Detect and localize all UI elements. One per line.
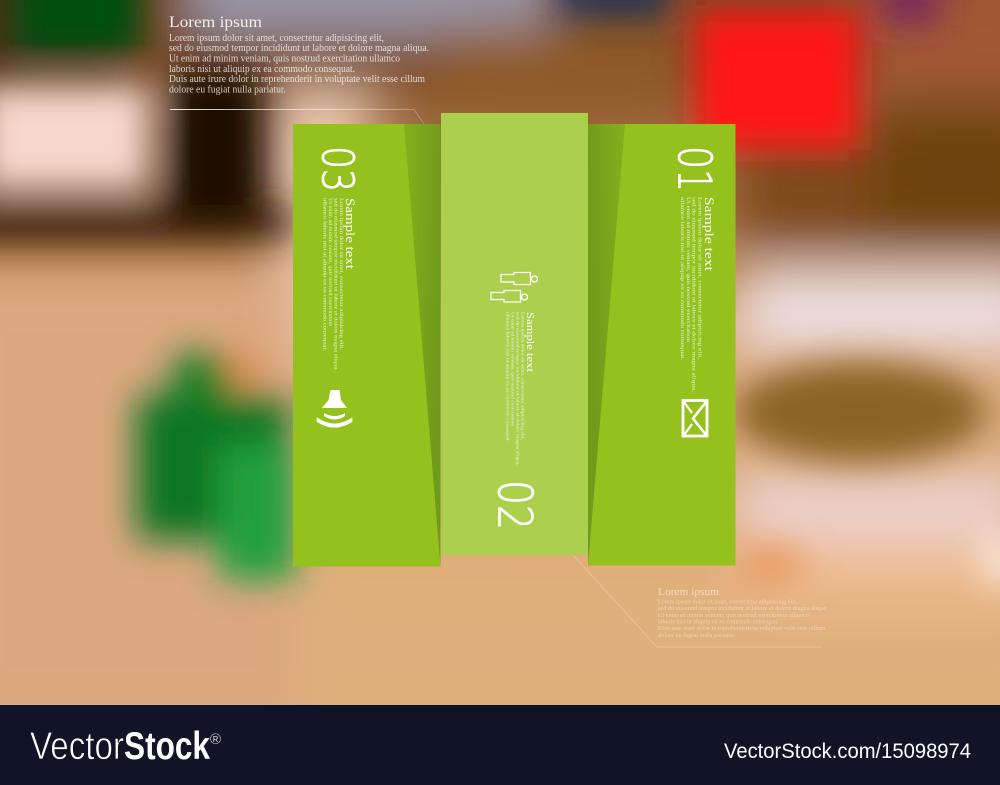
paragraph 02 bbox=[506, 312, 526, 466]
paragraph 01: Ut enim ad minim veniam, quis nostrud exercitation bbox=[685, 197, 691, 342]
bottom paragraph bbox=[658, 598, 828, 639]
paragraph 03: sed do eiusmod tempor incididunt ut labore et dolore magna aliqua. bbox=[332, 198, 338, 371]
heading 02: Sample text bbox=[524, 312, 535, 372]
fold shade 03 bbox=[404, 124, 440, 566]
paragraph 02: sed do eiusmod tempor incididunt ut labore et dolore magna aliqua. bbox=[516, 312, 520, 466]
top paragraph bbox=[169, 33, 429, 96]
bottom paragraph: dolore eu fugiat nulla pariatur. bbox=[658, 632, 735, 639]
panel 03 bbox=[293, 124, 440, 566]
bottom paragraph: sed do eiusmod tempor incididunt ut labore et dolore magna aliqua. bbox=[658, 605, 828, 612]
paragraph 03 bbox=[322, 198, 344, 371]
paragraph 03: ullamco laboris nisi ut aliquip ex ea commodo consequat. bbox=[322, 198, 328, 351]
paragraph 02: Lorem ipsum dolor sit amet, consectetur adipisicing elit, bbox=[520, 312, 526, 440]
panel 02 bbox=[441, 113, 588, 555]
heading 03: Sample text bbox=[343, 198, 357, 270]
paragraph 03: Lorem ipsum dolor sit amet, consectetur adipisicing elit, bbox=[338, 198, 344, 350]
top paragraph: sed do eiusmod tempor incididunt ut labore et dolore magna aliqua. bbox=[169, 43, 429, 54]
top paragraph: dolore eu fugiat nulla pariatur. bbox=[169, 84, 286, 96]
top text block bbox=[169, 14, 429, 96]
paragraph 01: Lorem ipsum dolor sit amet, consectetur adipisicing elit, bbox=[696, 197, 702, 360]
footer logo bbox=[30, 725, 221, 768]
heading 01: Sample text bbox=[702, 197, 716, 272]
top leader line bbox=[170, 110, 424, 124]
bottom paragraph: Lorem ipsum dolor sit amet, consectetur adipisicing elit, bbox=[658, 598, 797, 606]
number 03: 03 bbox=[312, 146, 362, 192]
paragraph 03: Ut enim ad minim veniam, quis nostrud exercitation bbox=[327, 198, 333, 327]
paragraph 02: ullamco laboris nisi ut aliquip ex ea commodo consequat. bbox=[506, 312, 510, 442]
top heading: Lorem ipsum bbox=[169, 14, 263, 31]
panel 01 bbox=[588, 124, 736, 566]
top paragraph: Duis aute irure dolor in reprehenderit in voluptate velit esse cillum bbox=[169, 74, 425, 85]
icon: envelope bbox=[683, 400, 707, 436]
paragraph 01: ullamco laboris nisi ut aliquip ex ea commodo consequat. bbox=[679, 197, 685, 360]
top paragraph: Lorem ipsum dolor sit amet, consectetur adipisicing elit, bbox=[169, 33, 384, 44]
number 02: 02 bbox=[486, 480, 542, 530]
footer logo: Stock bbox=[124, 725, 210, 768]
paragraph 01 bbox=[679, 197, 702, 392]
paragraph 02: Ut enim ad minim veniam, quis nostrud exercitation bbox=[510, 312, 516, 427]
bottom heading: Lorem ipsum bbox=[658, 586, 719, 598]
fold shade 01 bbox=[588, 124, 625, 566]
icon: speaker bbox=[317, 390, 352, 427]
paragraph 01: sed do eiusmod tempor incididunt ut labore et dolore magna aliqua. bbox=[690, 197, 696, 392]
footer image id: VectorStock.com/15098974 bbox=[724, 739, 971, 763]
bottom text block bbox=[658, 586, 828, 639]
top paragraph: Ut enim ad minim veniam, quis nostrud exercitation ullamco bbox=[169, 54, 400, 64]
bottom paragraph: laboris nisi ut aliquip ex ea commodo consequat. bbox=[658, 618, 779, 626]
bottom paragraph: Duis aute irure dolor in reprehenderit in voluptate velit esse cillum bbox=[658, 625, 826, 632]
footer logo: Vector bbox=[30, 725, 124, 768]
footer bar bbox=[0, 705, 1000, 785]
footer logo: ® bbox=[210, 731, 221, 748]
number 01: 01 bbox=[668, 146, 722, 192]
bottom leader line bbox=[573, 555, 822, 647]
bottom paragraph: Ut enim ad minim veniam, quis nostrud exercitation ullamco bbox=[658, 612, 810, 619]
icon: two plugs bbox=[491, 272, 538, 302]
top paragraph: laboris nisi ut aliquip ex ea commodo consequat. bbox=[169, 64, 355, 75]
